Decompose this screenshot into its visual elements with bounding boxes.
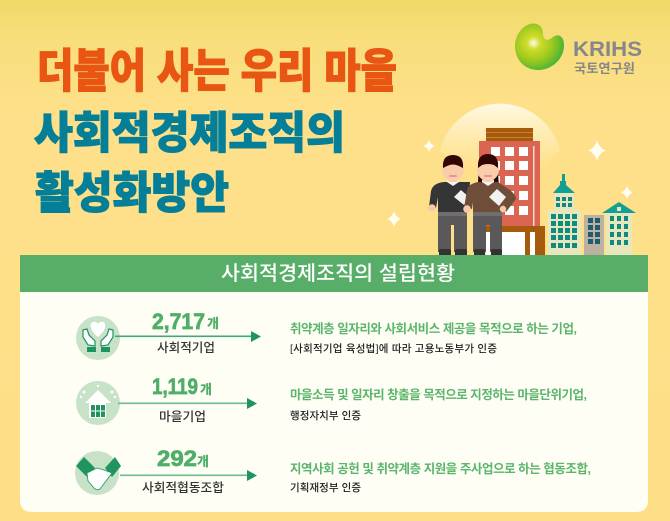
label: 사회적협동조합 (142, 480, 224, 495)
teal tower (548, 174, 581, 255)
woman (463, 154, 516, 255)
arrow (115, 331, 261, 342)
row: village enterprise (76, 374, 587, 425)
description: 마을소득 및 일자리 창출을 목적으로 지정하는 마을단위기업, (290, 387, 587, 402)
description (290, 321, 577, 355)
illustration: people and city (387, 104, 636, 255)
icon: house (76, 381, 120, 425)
panel body (20, 292, 648, 512)
description: 지역사회 공헌 및 취약계층 지원을 주사업으로 하는 협동조합, (290, 461, 591, 476)
logo korean name: 국토연구원 (574, 61, 635, 76)
sun glow (440, 104, 560, 170)
sparkles (387, 140, 633, 227)
description (290, 461, 591, 494)
title: 더불어 사는 우리 마을 (37, 45, 397, 97)
logo wordmark: KRIHS (573, 37, 642, 61)
label: 마을기업 (159, 410, 206, 424)
number: 2,717 (152, 309, 205, 334)
label: 사회적기업 (157, 341, 215, 355)
icon: handshake (75, 451, 121, 495)
panel header (20, 255, 648, 292)
unit: 개 (197, 454, 209, 469)
red building (479, 128, 545, 255)
man (428, 155, 470, 255)
logo: KRIHS (515, 24, 642, 76)
description: 행정자치부 인증 (290, 410, 361, 422)
unit: 개 (200, 382, 212, 397)
panel: establishment status (20, 255, 648, 512)
arrow (118, 398, 257, 409)
row: social enterprise (76, 309, 577, 360)
description: 기획재정부 인증 (290, 481, 361, 494)
logo mark (515, 24, 564, 70)
description (290, 387, 587, 422)
panel heading: 사회적경제조직의 설립현황 (221, 262, 455, 285)
title: 활성화방안 (35, 169, 229, 218)
description: [사회적기업 육성법]에 따라 고용노동부가 인증 (290, 342, 497, 355)
number: 1,119 (152, 374, 198, 399)
grey building (584, 215, 604, 255)
icon: hands and heart (76, 316, 120, 360)
unit: 개 (207, 316, 219, 331)
number: 292 (157, 446, 197, 471)
green roof house (602, 202, 636, 255)
title: 사회적경제조직의 (34, 109, 345, 158)
description: 취약계층 일자리와 사회서비스 제공을 목적으로 하는 기업, (290, 321, 577, 336)
title (34, 45, 397, 218)
arrow (120, 470, 257, 481)
row: social cooperative (75, 446, 591, 495)
